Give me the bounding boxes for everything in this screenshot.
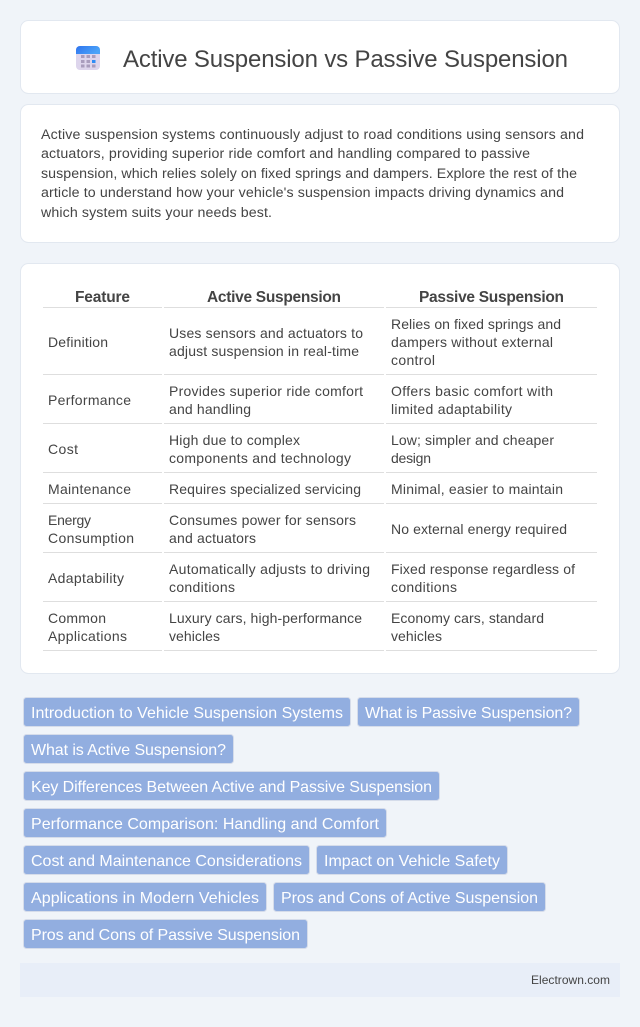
row: performance: Offers basic comfort with <box>391 383 553 399</box>
row: performance: limited adaptability <box>391 401 512 417</box>
row: energy consumption: Consumption <box>48 530 134 546</box>
tag: What is Passive Suspension? <box>365 705 572 722</box>
row: performance: Provides superior ride comfort <box>169 383 363 399</box>
row: cost: design <box>391 450 431 466</box>
tag <box>24 698 350 726</box>
row: adaptability: Adaptability <box>48 570 124 586</box>
row: energy consumption: Energy <box>48 512 91 528</box>
topic tags <box>24 698 580 948</box>
row: energy consumption <box>48 512 567 546</box>
footer <box>20 963 620 997</box>
tag: Applications in Modern Vehicles <box>31 890 259 907</box>
row: common applications: Common <box>48 610 106 626</box>
tag <box>24 846 310 874</box>
row: adaptability: Automatically adjusts to driving <box>169 561 370 577</box>
row: definition: control <box>391 352 435 368</box>
row: performance <box>48 383 553 417</box>
row: adaptability: conditions <box>391 579 457 595</box>
panel: introduction <box>20 104 620 242</box>
row: cost: High due to complex <box>169 432 300 448</box>
row: adaptability <box>48 561 575 595</box>
intro text <box>40 127 584 221</box>
panel: header <box>20 20 620 94</box>
row: definition: Definition <box>48 334 108 350</box>
tag: Performance Comparison: Handling and Comfort <box>31 816 380 833</box>
row: common applications <box>48 610 544 644</box>
row: cost: Cost <box>48 441 78 457</box>
row: adaptability: conditions <box>169 579 235 595</box>
tag: Pros and Cons of Passive Suspension <box>31 927 300 944</box>
panel: comparison table <box>20 264 620 674</box>
tag <box>24 734 234 764</box>
tag: Cost and Maintenance Considerations <box>31 853 302 870</box>
row: maintenance <box>48 481 563 497</box>
tag <box>24 920 308 948</box>
row: definition: adjust suspension in real-time <box>169 343 359 359</box>
row: definition: dampers without external <box>391 334 553 350</box>
tag: Introduction to Vehicle Suspension Systems <box>31 705 343 722</box>
intro text: suspension, which relies solely on fixed springs and dampers. Explore the rest of the <box>41 166 577 182</box>
row: adaptability: Fixed response regardless of <box>391 561 575 577</box>
row: common applications: Economy cars, standard <box>391 610 544 626</box>
row: common applications: vehicles <box>169 628 220 644</box>
tag <box>358 698 580 726</box>
row: cost <box>48 432 554 466</box>
intro text: actuators, providing superior ride comfort and handling compared to passive <box>41 146 530 162</box>
intro text: which system suits your needs best. <box>40 205 272 221</box>
tag: Key Differences Between Active and Passive Suspension <box>31 779 432 796</box>
tag <box>24 882 266 912</box>
row: cost: Low; simpler and cheaper <box>391 432 554 448</box>
tag <box>24 808 386 838</box>
row: energy consumption: and actuators <box>169 530 256 546</box>
table header: Passive Suspension <box>419 289 564 306</box>
row: performance: and handling <box>169 401 251 417</box>
table header <box>75 289 564 306</box>
row: definition: Relies on fixed springs and <box>391 316 561 332</box>
tag: Pros and Cons of Active Suspension <box>281 890 538 907</box>
row: cost: components and technology <box>169 450 351 466</box>
tag: Impact on Vehicle Safety <box>324 853 500 870</box>
row: definition: Uses sensors and actuators to <box>169 325 363 341</box>
intro text: article to understand how your vehicle's suspension impacts driving dynamics and <box>41 185 564 201</box>
tag <box>274 882 546 912</box>
footer: Electrown.com <box>531 973 610 987</box>
row: maintenance: Minimal, easier to maintain <box>391 481 563 497</box>
tag <box>24 772 440 800</box>
tag <box>316 846 508 874</box>
row: performance: Performance <box>48 392 131 408</box>
row: energy consumption: No external energy required <box>391 521 567 537</box>
row: maintenance: Requires specialized servicing <box>169 481 361 497</box>
row: definition <box>48 316 561 368</box>
row: energy consumption: Consumes power for sensors <box>169 512 356 528</box>
icon: calendar <box>76 46 100 70</box>
tag: What is Active Suspension? <box>31 742 226 759</box>
intro text: Active suspension systems continuously adjust to road conditions using sensors and <box>41 127 584 143</box>
row: common applications: vehicles <box>391 628 442 644</box>
row: maintenance: Maintenance <box>48 481 131 497</box>
table header: Active Suspension <box>207 289 341 306</box>
title: Active Suspension vs Passive Suspension <box>123 46 568 73</box>
row: common applications: Luxury cars, high-performance <box>169 610 362 626</box>
table row lines <box>43 307 597 651</box>
row: common applications: Applications <box>48 628 127 644</box>
table header: Feature <box>75 289 130 306</box>
